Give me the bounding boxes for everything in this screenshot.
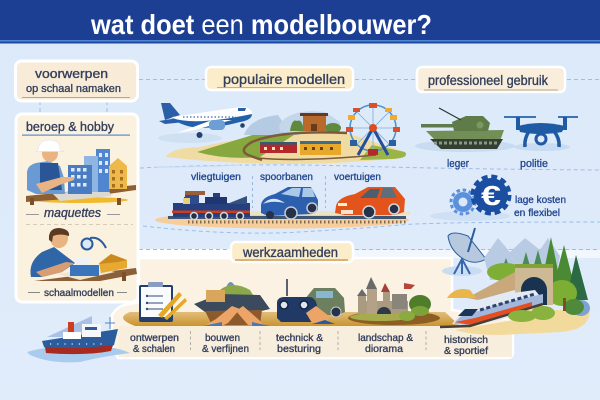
label: historisch: historisch: [444, 334, 488, 346]
illustration: airplane: [159, 103, 252, 138]
illustration: track base: [155, 211, 410, 228]
panel: werkzaamheden: [112, 258, 513, 358]
label: besturing: besturing: [277, 343, 321, 355]
illustration: castle diorama: [348, 277, 440, 325]
panel: beroep en hobby: [16, 114, 138, 302]
label strip: [119, 326, 512, 357]
text: voorwerpen: voorwerpen: [35, 66, 108, 81]
ferris wheel: [346, 103, 400, 155]
heading: werkzaamheden: [231, 242, 353, 262]
illustration: forest, tunnel and train: [440, 237, 590, 335]
illustration: modelmaker with magnifier: [30, 228, 137, 281]
illustration: workbench with hands: [194, 282, 270, 326]
label: vliegtuigen: vliegtuigen: [191, 171, 241, 183]
icon: gears with euro: [430, 176, 510, 221]
title: wat doet een modelbouwer?: [90, 9, 432, 40]
illustration: ship: [27, 316, 130, 362]
label: spoorbanen: spoorbanen: [260, 171, 313, 183]
label: & verfijnen: & verfijnen: [202, 343, 249, 355]
heading: populaire modellen: [206, 67, 353, 90]
illustration: architect with maquette: [26, 140, 136, 205]
ground band: [123, 312, 460, 326]
text: lage kosten: lage kosten: [515, 194, 566, 206]
label: bouwen: bouwen: [205, 332, 240, 344]
label: & sportief: & sportief: [444, 345, 488, 357]
label: voertuigen: voertuigen: [334, 171, 381, 183]
label: maquettes: maquettes: [44, 206, 101, 220]
euro sign: €: [481, 180, 502, 211]
label: politie: politie: [520, 158, 548, 170]
illustration: remote control and car: [277, 279, 345, 324]
label: technick &: technick &: [276, 332, 323, 344]
heading text: werkzaamheden: [242, 245, 338, 260]
illustration: tank: [415, 108, 515, 152]
illustration: blue car: [261, 187, 318, 219]
text: op schaal namaken: op schaal namaken: [26, 83, 121, 95]
label: diorama: diorama: [365, 343, 403, 355]
step labels: [130, 332, 488, 357]
illustration: locomotive: [172, 191, 250, 220]
illustration: popular models island: [158, 103, 406, 164]
illustration: satellite dish: [442, 228, 486, 276]
heading: beroep & hobby: beroep & hobby: [26, 120, 115, 134]
panel: voorwerpen op schaal namaken: [16, 61, 138, 101]
illustration: clipboard and rulers: [139, 282, 187, 322]
label: landschap &: landschap &: [358, 332, 413, 344]
label: ontwerpen: ontwerpen: [130, 332, 179, 344]
label: leger: leger: [447, 158, 469, 170]
label: schaalmodellen: schaalmodellen: [44, 287, 114, 299]
text: en flexibel: en flexibel: [514, 207, 560, 219]
illustration: orange car: [335, 187, 405, 218]
heading: professioneel gebruik: [417, 67, 565, 92]
heading text: professioneel gebruik: [428, 73, 548, 88]
header banner: [0, 0, 600, 44]
illustration: drone: [504, 117, 578, 151]
heading text: populaire modellen: [223, 72, 345, 87]
label: & schalen: & schalen: [133, 343, 175, 355]
